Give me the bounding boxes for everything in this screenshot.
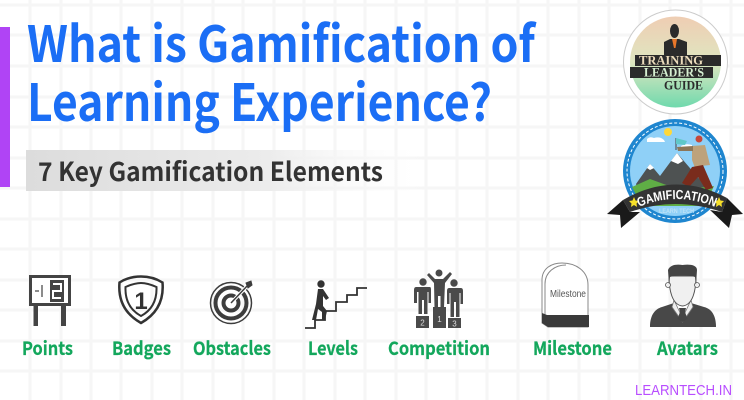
- labels: Levels: [308, 335, 358, 361]
- icon: competition podium: [414, 270, 463, 328]
- title: [27, 5, 537, 136]
- logo: Training Leader's Guide: TRAINING: [639, 52, 703, 68]
- logo: Training Leader's Guide: GUIDE: [664, 78, 703, 92]
- icon: competition podium: 2: [420, 318, 425, 328]
- icon: levels stairs: [305, 280, 367, 328]
- icon: competition podium: 1: [437, 315, 442, 324]
- icon: badge shield: [119, 276, 163, 323]
- icon: obstacles target: [210, 281, 252, 324]
- icon: milestone tombstone: Milestone: [550, 289, 586, 300]
- labels: Badges: [112, 335, 171, 361]
- icon: avatar: [650, 265, 716, 327]
- labels: Avatars: [656, 335, 718, 361]
- subtitle band: 7 Key Gamification Elements: [38, 152, 383, 189]
- accent bar: [0, 27, 10, 187]
- icon: badge shield: 1: [134, 288, 148, 315]
- icon: milestone tombstone: [542, 263, 589, 327]
- icon: competition podium: 3: [452, 320, 457, 328]
- logo: Gamification badge: [607, 119, 743, 228]
- logo: Training Leader's Guide: LEADER'S: [644, 64, 704, 80]
- labels: Competition: [388, 335, 490, 361]
- labels: Milestone: [533, 335, 612, 361]
- labels: [22, 335, 718, 361]
- logo: Training Leader's Guide: [624, 10, 728, 114]
- logo: Gamification badge: GAMIFICATION: [637, 190, 718, 207]
- labels: Points: [22, 335, 73, 361]
- icon: points scoreboard: [30, 276, 70, 326]
- title: What is Gamification of: [27, 5, 537, 77]
- title: Learning Experience?: [27, 62, 492, 136]
- labels: Obstacles: [193, 335, 271, 361]
- footer credit: LEARNTECH.IN: [635, 382, 732, 399]
- logo: Gamification badge: LEARN TECH: [659, 208, 694, 215]
